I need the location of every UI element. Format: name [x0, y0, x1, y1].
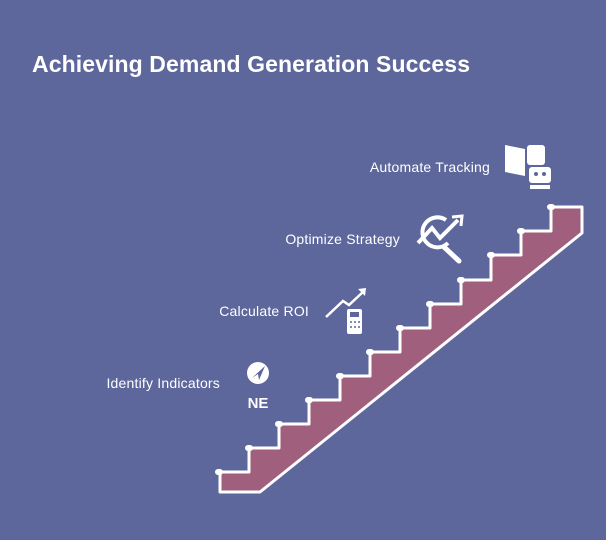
- icon: optimize magnifier: [418, 216, 462, 261]
- icon: chart + calculator: [326, 288, 366, 334]
- label: Identify Indicators: Identify Indicators: [106, 375, 220, 391]
- label: Calculate ROI: Calculate ROI: [219, 303, 309, 319]
- title: Achieving Demand Generation Success: [32, 51, 470, 77]
- label: Automate Tracking: Automate Tracking: [370, 159, 490, 175]
- icon: compass NE: NE: [248, 395, 268, 412]
- staircase: [215, 204, 582, 492]
- icon: book + robot: [505, 145, 551, 189]
- icon: compass NE: [247, 362, 269, 412]
- label: Optimize Strategy: Optimize Strategy: [285, 231, 400, 247]
